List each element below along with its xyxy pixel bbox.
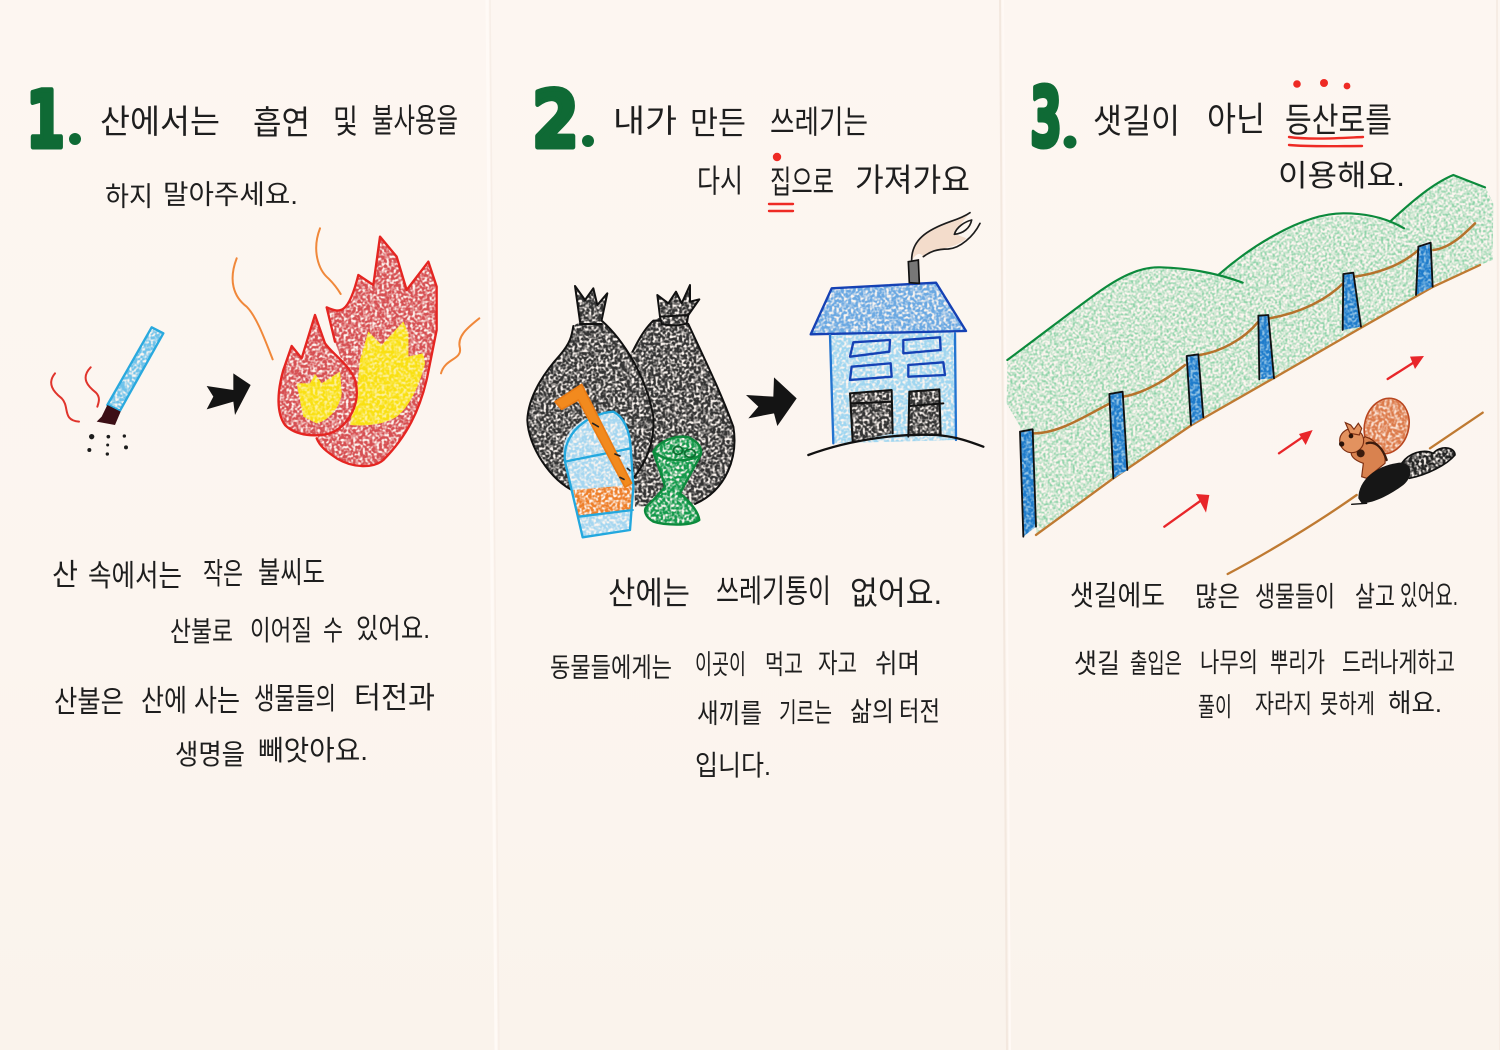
emphasis marks: [769, 153, 793, 211]
body text line 1: [52, 557, 325, 593]
icon: plastic cup with straw: [555, 384, 633, 537]
body text line 3: 기르는: [779, 698, 832, 728]
heading line 2: [105, 180, 298, 212]
icon: trash bags: [527, 285, 734, 507]
body text line 2: 뿌리가: [1270, 648, 1325, 678]
heading line 1: [613, 103, 868, 141]
body text line 3: [697, 697, 940, 729]
body text line 3: 생물들의: [254, 683, 336, 716]
body text line 3: 산불은: [54, 686, 124, 719]
body text line 2: 쉬며: [875, 649, 920, 679]
panel 3: use marked trails: [1007, 71, 1493, 722]
body text line 2: [550, 649, 920, 683]
icon: lit cigarette: [51, 327, 163, 456]
body text line 1: 살고: [1355, 581, 1395, 612]
heading line 2: 다시: [697, 163, 743, 199]
heading line 1: 흡연: [253, 104, 310, 141]
heading line 1: 아닌: [1207, 101, 1265, 139]
body text line 4: 입니다.: [695, 750, 771, 781]
heading line 1: 등산로를: [1285, 102, 1392, 140]
fence ropes and trail edge: [1033, 223, 1480, 535]
body text line 1: 생물들이: [1255, 581, 1335, 612]
body text line 2: 출입은: [1130, 649, 1182, 679]
body text line 2: 드러나게하고: [1342, 648, 1455, 678]
heading line 1: 샛길이: [1093, 103, 1180, 141]
body text line 2: 이어질: [250, 615, 312, 646]
illustration: cigarette to flames: [51, 228, 479, 466]
body text line 3: [54, 682, 435, 719]
body text line 1: 속에서는: [88, 560, 182, 593]
body text line 3: 삶의: [850, 697, 894, 727]
body text line 3: 산에 사는: [141, 685, 240, 718]
heading line 1: 및: [333, 103, 358, 140]
body text line 2: [1074, 648, 1455, 679]
body text line 3: 해요.: [1388, 688, 1442, 718]
body text line 3: 못하게: [1320, 689, 1375, 719]
body text line 2: 샛길: [1074, 649, 1120, 679]
body text line 1: 산: [52, 559, 78, 592]
icon: squirrel on burrow: [1339, 393, 1455, 504]
body text line 1: 산에는: [608, 575, 690, 611]
heading line 1: 산에서는: [100, 103, 220, 140]
arrow: [207, 373, 251, 415]
heading line 2: 이용해요.: [1278, 160, 1405, 193]
arrow: [746, 377, 797, 426]
icon: green can: [645, 437, 701, 525]
icon: flames: [233, 228, 479, 466]
body text line 2: 있어요.: [356, 613, 430, 644]
body text line 2: 이곳이: [695, 650, 746, 680]
emphasis marks: [1289, 79, 1363, 146]
panel 1: no smoking or fire: [26, 76, 479, 770]
body text line 3: 터전과: [354, 682, 435, 715]
heading line 1: 만든: [690, 105, 746, 141]
heading line 2: [697, 162, 970, 200]
body text line 2: 먹고: [765, 650, 803, 680]
heading number 1: 1: [26, 76, 65, 166]
heading line 2: 가져가요: [855, 162, 970, 198]
panel 2: take trash home: [527, 76, 983, 781]
body text line 2: 동물들에게는: [550, 653, 672, 683]
body text line 2: 자고: [818, 649, 857, 679]
heading line 1: [1093, 101, 1392, 141]
illustration: trash to house: [527, 213, 983, 537]
body text line 4: 빼앗아요.: [258, 735, 368, 766]
heading line 1: 내가: [613, 103, 677, 139]
red direction arrows: [1164, 356, 1424, 527]
body text line 3: 새끼를: [697, 699, 762, 729]
heading line 2: 집으로: [770, 164, 834, 200]
heading line 2: 하지: [105, 182, 153, 212]
body text line 4: [175, 735, 368, 770]
heading number 3: 3: [1030, 71, 1062, 166]
lower trail edge: [1228, 413, 1483, 574]
body text line 2: 산불로: [170, 616, 233, 647]
heading line 2: 말아주세요.: [163, 180, 298, 210]
body text line 1: 작은: [203, 558, 243, 591]
icon: house with chimney smoke: [808, 213, 983, 455]
body text line 1: 불씨도: [258, 557, 325, 590]
illustration: fenced mountain trail: [1007, 175, 1493, 574]
body text line 1: [1070, 580, 1458, 612]
green hillside: [1007, 175, 1493, 535]
body text line 3: 풀이: [1198, 692, 1232, 722]
body text line 2: [170, 613, 430, 647]
body text line 3: 자라지: [1255, 689, 1312, 719]
body text line 2: 나무의: [1200, 648, 1258, 678]
body text line 2: 수: [323, 615, 343, 646]
body text line 1: 많은: [1195, 581, 1240, 612]
body text line 4: 생명을: [175, 739, 245, 770]
heading line 1: 불사용을: [372, 102, 458, 139]
heading number 2: 2: [532, 76, 579, 166]
body text line 1: 있어요.: [1400, 580, 1458, 611]
body text line 1: 샛길에도: [1070, 580, 1165, 611]
heading line 1: 쓰레기는: [770, 104, 868, 140]
body text line 1: 쓰레기통이: [716, 573, 831, 609]
body text line 1: 없어요.: [850, 575, 942, 611]
fence posts: [1020, 243, 1433, 537]
body text line 3: 터전: [899, 697, 940, 727]
body text line 3: [1198, 688, 1442, 722]
heading line 1: [100, 102, 458, 141]
body text line 1: [608, 573, 942, 611]
